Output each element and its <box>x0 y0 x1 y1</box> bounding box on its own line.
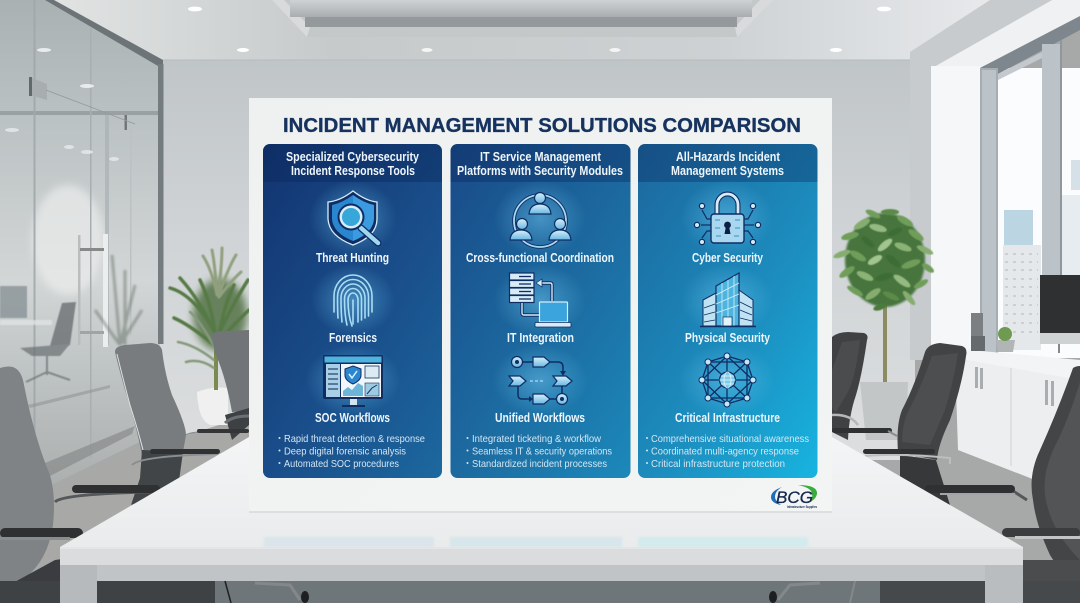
icon: unified workflow chart <box>509 356 572 404</box>
BCG logo: Infrastructure Supplies <box>787 505 817 509</box>
chair left front <box>0 366 160 603</box>
bullet list: Standardized incident processes <box>472 458 607 470</box>
bullet list <box>278 433 425 470</box>
chair middle left <box>115 343 220 505</box>
title: INCIDENT MANAGEMENT SOLUTIONS COMPARISON <box>283 115 801 137</box>
panel heading: IT Service Management <box>480 150 602 164</box>
icon: shield with magnifier <box>328 191 378 245</box>
chair far right <box>832 332 897 440</box>
panel heading: Platforms with Security Modules <box>457 164 623 178</box>
bullet list: Deep digital forensic analysis <box>284 446 406 458</box>
bullet list: Coordinated multi-agency response <box>651 446 799 458</box>
label: physical security: Physical Security <box>685 331 770 345</box>
bullet list: Automated SOC procedures <box>284 458 399 470</box>
chair middle right <box>863 343 1027 505</box>
ceiling <box>48 0 1000 60</box>
bullet list: Comprehensive situational awareness <box>651 433 809 445</box>
bullet list <box>466 433 612 470</box>
bullet list: Integrated ticketing & workflow <box>472 433 601 445</box>
chair legs under table <box>225 581 855 603</box>
icon: fingerprint <box>334 275 372 326</box>
plant left <box>170 248 249 425</box>
panel: all-hazards systems <box>638 144 818 478</box>
bullet list: Rapid threat detection & response <box>284 433 425 445</box>
board <box>249 98 832 513</box>
BCG logo <box>771 485 817 509</box>
chair right front <box>940 366 1080 603</box>
left floor <box>40 415 250 560</box>
icon: people in a circle <box>510 192 571 247</box>
label: unified workflows: Unified Workflows <box>495 411 585 425</box>
icon: servers and laptop <box>510 273 571 327</box>
glass partition <box>0 0 164 510</box>
panel heading: Management Systems <box>671 164 784 178</box>
icon: padlock with circuits <box>694 194 761 245</box>
bullet list: Seamless IT & security operations <box>472 446 612 458</box>
bullet list <box>646 433 809 470</box>
label: forensics: Forensics <box>329 331 377 345</box>
label: cross-functional coordination: Cross-functional Coordination <box>466 251 614 265</box>
right window area <box>910 0 1080 368</box>
cabinet and desk objects <box>955 275 1080 600</box>
label: threat hunting: Threat Hunting <box>316 251 389 265</box>
panel heading <box>286 150 419 178</box>
BCG logo: BCG <box>776 488 813 507</box>
panel: IT service management platforms <box>450 144 630 478</box>
reflected plant <box>95 255 142 345</box>
icon: office buildings <box>700 273 756 326</box>
icon: SOC monitor dashboard <box>323 355 383 407</box>
panel heading <box>671 150 784 178</box>
label: SOC workflows: SOC Workflows <box>315 411 390 425</box>
panel heading: Specialized Cybersecurity <box>286 150 419 164</box>
label: cyber security: Cyber Security <box>692 251 763 265</box>
plant right <box>833 208 935 440</box>
panel heading: Incident Response Tools <box>291 164 415 178</box>
bullet list: Critical infrastructure protection <box>651 458 785 470</box>
panel heading <box>457 150 623 178</box>
label: IT integration: IT Integration <box>507 331 574 345</box>
door handle <box>78 234 108 347</box>
panel heading: All-Hazards Incident <box>676 150 781 164</box>
icon: network globe <box>699 353 756 407</box>
conference table <box>0 437 1080 603</box>
reflected desk and chair <box>0 286 76 382</box>
label: critical infrastructure: Critical Infrastructure <box>675 411 780 425</box>
chair far left <box>186 330 249 440</box>
panel: specialized cybersecurity tools <box>263 144 442 478</box>
